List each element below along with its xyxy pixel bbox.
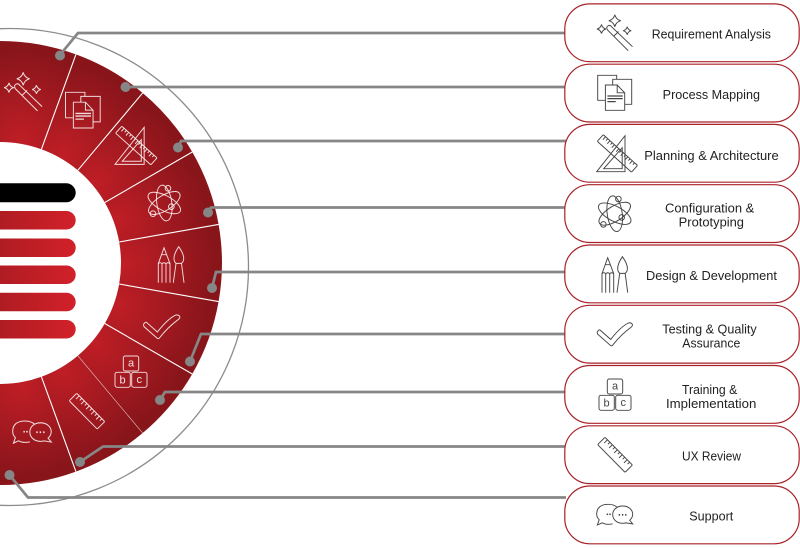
icon: check mark: [597, 323, 632, 346]
segment: planning and architecture: [78, 93, 192, 202]
icon: abc blocks: [599, 379, 631, 410]
card: UX Review: [565, 426, 799, 484]
red bar 1: [0, 211, 76, 230]
wheel icon: abc blocks: [115, 356, 147, 387]
icon: set square and ruler: [597, 135, 638, 172]
label: Configuration &: [665, 202, 755, 216]
outer thin grey circle: [0, 28, 248, 506]
wheel icon: magic wand: [4, 72, 42, 111]
wheel icon: speech bubbles: [13, 421, 51, 443]
connector 5: [207, 272, 566, 293]
label: UX Review: [682, 450, 742, 464]
icon: abc blocks: c: [621, 397, 627, 409]
connector 8: [75, 446, 566, 467]
segment: requirement analysis: [0, 41, 76, 149]
card: Training & Implementation: [565, 366, 799, 423]
segment: configuration and prototyping: [105, 152, 219, 242]
label: Support: [689, 510, 734, 524]
segment: support: [0, 377, 76, 485]
label: Training &: [682, 383, 738, 397]
segment: training and implementation: [78, 324, 192, 433]
connector 7: [155, 392, 566, 405]
card: Support: [565, 486, 799, 544]
wheel icon: ruler: [69, 393, 105, 429]
connector 1: [55, 33, 566, 60]
wheel icon: abc blocks: a: [128, 358, 135, 370]
icon: ruler: [598, 437, 632, 472]
icon: abc blocks: b: [604, 398, 610, 410]
wheel icon: check mark: [144, 315, 180, 339]
card: Testing & Quality Assurance: [565, 305, 799, 363]
connector 3: [173, 141, 566, 152]
label: Requirement Analysis: [652, 28, 771, 42]
red segmented wheel: [0, 41, 222, 485]
segment: testing and quality assurance: [105, 284, 219, 374]
label: Process Mapping: [663, 88, 760, 102]
wheel icon: pencil and brush: [158, 247, 184, 283]
connector 9: [4, 470, 566, 498]
label: Design & Development: [646, 269, 778, 283]
card: Planning & Architecture: [565, 124, 799, 182]
icon: atom: [595, 195, 634, 233]
label line 2: Assurance: [682, 337, 740, 351]
black bar: [0, 183, 76, 202]
red bar 4: [0, 293, 76, 311]
wheel icon: set square and ruler: [115, 126, 157, 165]
centre bars: [0, 183, 76, 338]
connector 4: [203, 208, 566, 218]
icon: documents: [598, 75, 632, 110]
label: Planning & Architecture: [644, 149, 779, 163]
card: Design & Development: [565, 245, 799, 303]
wheel icon: atom: [145, 184, 184, 222]
label line 2: Prototyping: [679, 216, 744, 230]
segment: process mapping: [41, 54, 143, 170]
wheel icon: abc blocks: b: [120, 374, 126, 386]
connector 6: [185, 334, 566, 366]
card: Requirement Analysis: [565, 4, 799, 62]
label: Testing & Quality: [662, 323, 757, 337]
red bar 2: [0, 238, 76, 257]
icon: magic wand: [597, 15, 632, 51]
red bar 3: [0, 266, 76, 284]
icon: speech bubbles: [597, 504, 633, 525]
wheel icon: abc blocks: c: [137, 374, 143, 386]
segment: UX review: [41, 356, 143, 472]
label line 2: Implementation: [666, 397, 756, 411]
red bar 5: [0, 320, 76, 338]
card: Process Mapping: [565, 64, 799, 122]
card: Configuration & Prototyping: [565, 185, 799, 242]
icon: abc blocks: a: [612, 380, 619, 392]
icon: pencil and brush: [602, 257, 628, 293]
wheel icon: documents: [66, 92, 100, 128]
segment: design and development: [119, 224, 222, 302]
connector 2: [120, 82, 566, 92]
